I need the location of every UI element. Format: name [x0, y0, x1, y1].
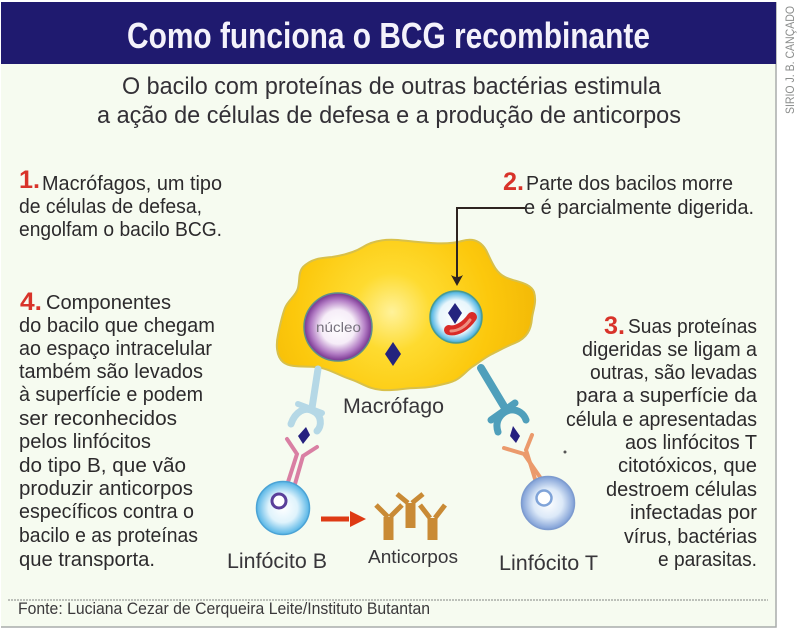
nucleus — [304, 293, 372, 361]
text block: step 1: engolfam o bacilo BCG. — [19, 219, 222, 241]
text block: step 1 — [19, 166, 222, 241]
text block: step 4: do bacilo que chegam — [19, 315, 215, 337]
text block: step 3: e parasitas. — [658, 549, 757, 571]
text block: step 3 — [566, 312, 758, 571]
text block: step 3: 3. — [604, 312, 625, 340]
text block: step 3: vírus, bactérias — [624, 526, 757, 548]
text block: step 4: bacilo e as proteínas — [19, 525, 198, 547]
text block: step 4 — [19, 288, 215, 571]
text block: step 4: específicos contra o — [19, 501, 194, 523]
arrow: B cell to antibodies — [321, 511, 366, 527]
text block: step 2: 2. — [503, 168, 524, 196]
text block: step 1: 1. — [19, 166, 40, 194]
T lymphocyte — [522, 476, 574, 530]
subtitle: O bacilo com proteínas de outras bactérias estimula — [122, 73, 661, 100]
labels: Linfócito B — [227, 550, 327, 573]
text block: step 4: 4. — [20, 288, 42, 316]
labels: Anticorpos — [368, 547, 458, 567]
antigen on T receptor — [510, 426, 520, 443]
antibodies — [376, 494, 445, 540]
text block: step 3: outras, são levadas — [590, 362, 757, 384]
text block: step 3: aos linfócitos T — [625, 432, 757, 454]
arrow: step 2 to vacuole — [451, 208, 525, 286]
text block: step 3: Suas proteínas — [628, 316, 757, 338]
source: Fonte: Luciana Cezar de Cerqueira Leite/Instituto Butantan — [18, 599, 430, 618]
subtitle: a ação de células de defesa e a produção de anticorpos — [97, 102, 681, 129]
labels: Linfócito T — [499, 552, 598, 575]
labels: Macrófago — [343, 395, 444, 418]
text block: step 4: produzir anticorpos — [19, 478, 193, 500]
labels — [227, 395, 598, 575]
text block: step 2: Parte dos bacilos morre — [526, 173, 733, 195]
text block: step 4: também são levados — [19, 361, 203, 383]
text block: step 2 — [503, 168, 754, 219]
text block: step 4: ser reconhecidos — [19, 408, 177, 430]
text block: step 4: à superfície e podem — [19, 384, 203, 406]
text block: step 3: citotóxicos, que — [618, 455, 757, 477]
T-cell receptor — [504, 435, 542, 482]
macrophage receptor: B side — [291, 369, 322, 431]
text block: step 4: do tipo B, que vão — [19, 455, 186, 477]
text block: step 3: destroem células — [606, 479, 757, 501]
text block: step 1: Macrófagos, um tipo — [42, 173, 222, 195]
vacuole with digested bacillus — [430, 291, 482, 343]
text block: step 3: para a superfície da — [576, 385, 758, 407]
text block: step 3: célula e apresentadas — [566, 409, 757, 431]
title banner: Como funciona o BCG recombinante — [127, 15, 650, 56]
B lymphocyte — [256, 482, 310, 534]
antigen diamond — [385, 342, 401, 366]
text block: step 4: pelos linfócitos — [19, 431, 151, 453]
B-cell receptor — [287, 439, 317, 484]
text block: step 4: ao espaço intracelular — [19, 338, 212, 360]
text block: step 1: de células de defesa, — [19, 196, 202, 218]
macrophage receptor: T side — [481, 368, 526, 432]
macrophage cell — [277, 240, 535, 390]
text block: step 4: Componentes — [46, 292, 171, 314]
subtitle — [97, 73, 681, 129]
title banner — [1, 2, 776, 64]
text block: step 3: infectadas por — [630, 502, 757, 524]
text block: step 4: que transporta. — [19, 549, 155, 571]
antigen on B receptor — [298, 427, 310, 444]
text block: step 3: digeridas se ligam a — [582, 339, 758, 361]
nucleus: núcleo — [316, 319, 361, 335]
text block: step 2: e é parcialmente digerida. — [524, 197, 754, 219]
